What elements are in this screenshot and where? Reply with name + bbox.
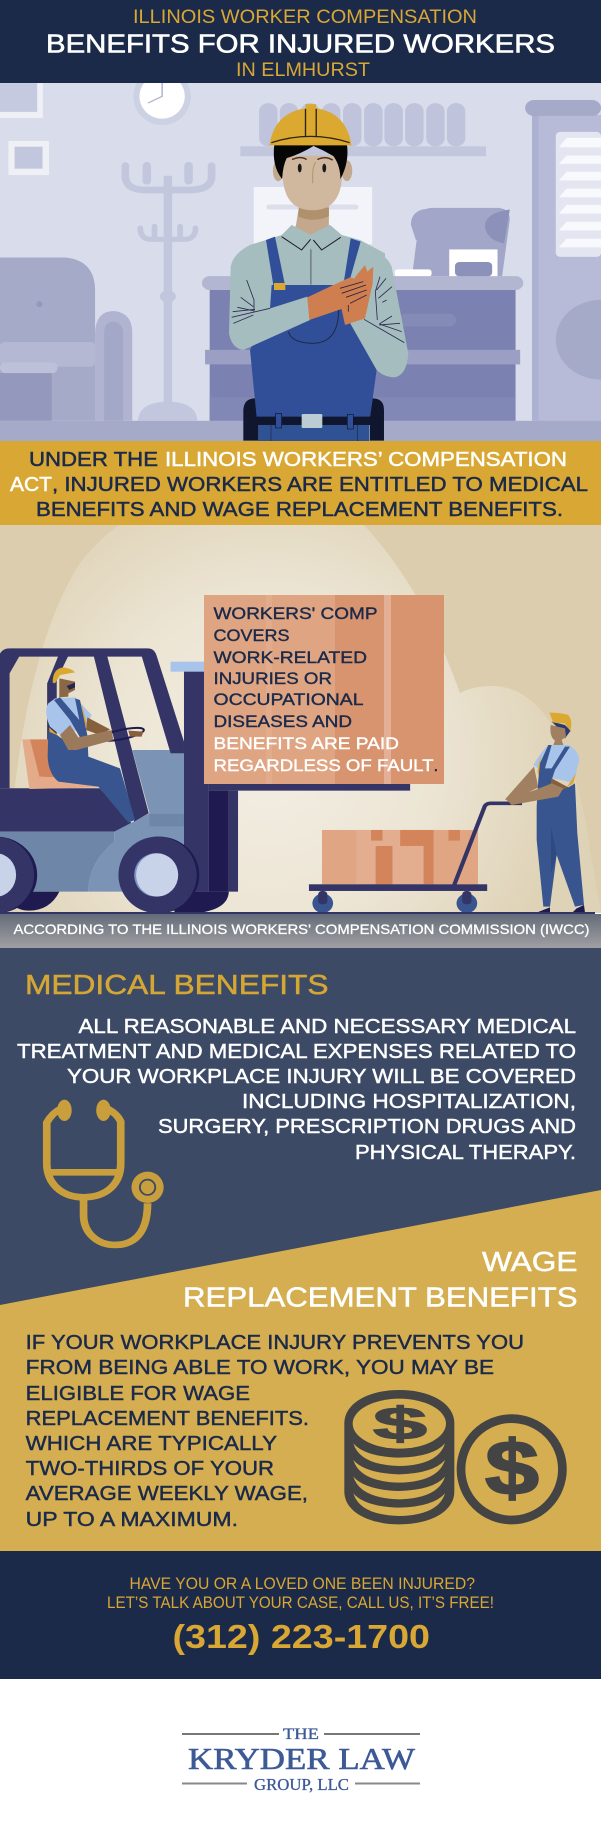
facial features xyxy=(292,158,333,183)
worker body in overalls xyxy=(229,225,408,442)
heading: medical benefits: MEDICAL BENEFITS xyxy=(25,969,328,1000)
gloves xyxy=(307,265,373,325)
wage benefits text: WHICH ARE TYPICALLY xyxy=(26,1433,277,1455)
glove lines xyxy=(340,282,367,312)
hard hat xyxy=(53,667,75,683)
legs and torso xyxy=(48,730,135,823)
far arm xyxy=(86,717,110,735)
callout text: BENEFITS ARE PAID xyxy=(214,734,399,753)
logo: The Kryder Law Group: GROUP, LLC xyxy=(254,1775,349,1794)
overalls xyxy=(537,745,584,907)
panel: office illustration xyxy=(0,68,601,442)
statement text: UNDER THE xyxy=(29,448,158,471)
cart frame xyxy=(309,803,522,913)
floor xyxy=(0,421,601,441)
hand xyxy=(128,731,143,737)
near arm xyxy=(507,783,563,805)
callout text: WORKERS' COMP xyxy=(214,604,378,623)
panel: wage replacement benefits xyxy=(0,1190,601,1551)
phone number: (312) 223-1700 xyxy=(172,1618,430,1655)
face xyxy=(283,155,342,210)
wage benefits text: IF YOUR WORKPLACE INJURY PREVENTS YOU xyxy=(26,1332,524,1354)
far arm xyxy=(505,767,538,802)
wall frames xyxy=(0,83,49,175)
callout text: INJURIES OR xyxy=(214,669,332,688)
paper on wall xyxy=(254,187,372,244)
wage benefits text: TWO-THIRDS OF YOUR xyxy=(26,1458,274,1480)
heading: wage replacement benefits xyxy=(183,1246,578,1312)
office background furniture xyxy=(0,68,601,441)
neck xyxy=(295,206,329,235)
call to action text: HAVE YOU OR A LOVED ONE BEEN INJURED? xyxy=(130,1575,475,1593)
worker head and hard hat xyxy=(269,104,352,210)
standing worker pushing cart xyxy=(505,713,585,913)
callout text: OCCUPATIONAL xyxy=(214,690,364,709)
medical benefits text: YOUR WORKPLACE INJURY WILL BE COVERED xyxy=(67,1066,576,1088)
panel: warehouse illustration xyxy=(0,525,601,914)
wheels xyxy=(0,837,199,913)
hair xyxy=(274,144,347,179)
wage benefits text xyxy=(26,1332,524,1531)
pocket stitching xyxy=(288,310,339,343)
heading: wage replacement benefits: REPLACEMENT BENEFITS xyxy=(183,1282,578,1312)
statement text: , INJURED WORKERS ARE ENTITLED TO MEDICAL xyxy=(52,473,588,496)
coat rack xyxy=(125,166,212,421)
icon: stacked coins xyxy=(344,1390,454,1524)
wage benefits text: REPLACEMENT BENEFITS. xyxy=(26,1408,309,1430)
ground line xyxy=(0,912,595,914)
call to action text xyxy=(107,1575,494,1612)
overall bib xyxy=(49,697,88,757)
spotlight dome background xyxy=(5,525,601,913)
callout text: DISEASES AND xyxy=(214,712,352,731)
rear wheel shadow xyxy=(11,892,59,911)
statement text: ILLINOIS WORKERS’ COMPENSATION xyxy=(165,448,567,471)
statement text xyxy=(10,448,588,521)
medical benefits text: ALL REASONABLE AND NECESSARY MEDICAL xyxy=(78,1016,576,1038)
icon: dollar coin: $ xyxy=(485,1426,539,1512)
hair xyxy=(552,722,571,738)
sleeve wrinkles xyxy=(232,277,404,343)
overall buckle xyxy=(274,283,285,290)
shelf with binders xyxy=(240,103,486,156)
forklift driver and seat xyxy=(22,667,145,823)
shirt arms xyxy=(229,245,408,377)
seat xyxy=(22,739,100,789)
boxes on cart xyxy=(322,830,478,884)
medical benefits text: INCLUDING HOSPITALIZATION, xyxy=(242,1091,576,1113)
leg shadow xyxy=(551,827,557,873)
sleeve shadow xyxy=(551,778,568,789)
shirt xyxy=(533,745,579,783)
tool pouches xyxy=(243,398,384,441)
logo: The Kryder Law Group: KRYDER LAW xyxy=(188,1741,416,1776)
ears xyxy=(273,160,352,181)
logo: The Kryder Law Group: THE xyxy=(283,1726,319,1743)
medical benefits text: PHYSICAL THERAPY. xyxy=(355,1142,576,1164)
statement text: BENEFITS AND WAGE REPLACEMENT BENEFITS. xyxy=(36,498,563,521)
callout text xyxy=(214,604,438,775)
safety harness xyxy=(537,755,576,787)
callout text: COVERS xyxy=(214,626,290,645)
cart with boxes xyxy=(309,803,522,913)
head xyxy=(59,678,75,697)
head xyxy=(550,725,566,745)
panel: medical benefits xyxy=(0,948,601,1551)
callout text: . xyxy=(434,756,438,775)
overalls xyxy=(250,237,377,417)
call to action text: LET’S TALK ABOUT YOUR CASE, CALL US, IT’S FREE! xyxy=(107,1594,494,1612)
reception desk xyxy=(202,208,523,421)
callout text: REGARDLESS OF FAULT xyxy=(214,756,434,775)
body panels xyxy=(0,750,184,892)
cargo box callout xyxy=(204,595,444,784)
near arm xyxy=(60,725,113,750)
heading: Illinois worker compensation: ILLINOIS WORKER COMPENSATION xyxy=(133,7,477,28)
icon: stacked coins: $ xyxy=(373,1398,427,1449)
heading: in Elmhurst: IN ELMHURST xyxy=(236,60,370,81)
cabinet with window blinds xyxy=(525,100,601,421)
medical benefits text: TREATMENT AND MEDICAL EXPENSES RELATED TO xyxy=(17,1041,576,1063)
placket xyxy=(310,249,312,285)
logo: The Kryder Law Group xyxy=(182,1726,420,1794)
collar lines xyxy=(282,237,341,250)
source text: ACCORDING TO THE ILLINOIS WORKERS' COMPENSATION COMMISSION (IWCC) xyxy=(14,921,590,937)
mast and fork xyxy=(171,662,410,913)
medical benefits text xyxy=(17,1016,576,1164)
callout text: WORK-RELATED xyxy=(214,648,367,667)
cab frame xyxy=(0,648,184,822)
wage benefits text: AVERAGE WEEKLY WAGE, xyxy=(26,1483,308,1505)
wage benefits text: FROM BEING ABLE TO WORK, YOU MAY BE xyxy=(26,1357,494,1379)
collar xyxy=(290,225,342,235)
source bar xyxy=(0,914,601,948)
shirt xyxy=(46,697,92,735)
shirt torso xyxy=(250,225,385,312)
icon: wall clock xyxy=(134,83,191,125)
armchair xyxy=(0,258,132,421)
hard hat xyxy=(269,104,351,145)
cab lower body xyxy=(0,788,132,832)
safety harness xyxy=(49,703,87,740)
hard hat xyxy=(549,713,571,731)
forklift body xyxy=(0,648,410,913)
panel: header banner xyxy=(0,0,601,83)
mustache xyxy=(67,683,75,690)
steering wheel xyxy=(100,725,145,743)
panel: gold intro statement xyxy=(0,441,601,525)
wage benefits text: ELIGIBLE FOR WAGE xyxy=(26,1383,250,1405)
icon: dollar coin xyxy=(461,1419,562,1520)
heading: wage replacement benefits: WAGE xyxy=(482,1246,578,1277)
statement text: ACT xyxy=(10,473,52,496)
boots xyxy=(537,905,585,913)
title: benefits for injured workers: BENEFITS FOR INJURED WORKERS xyxy=(46,28,555,58)
panel: call to action footer xyxy=(0,1551,601,1679)
lower pants and belt xyxy=(257,413,372,442)
medical benefits text: SURGERY, PRESCRIPTION DRUGS AND xyxy=(158,1116,576,1138)
wage benefits text: UP TO A MAXIMUM. xyxy=(26,1509,238,1531)
icon: stethoscope xyxy=(47,1100,164,1245)
